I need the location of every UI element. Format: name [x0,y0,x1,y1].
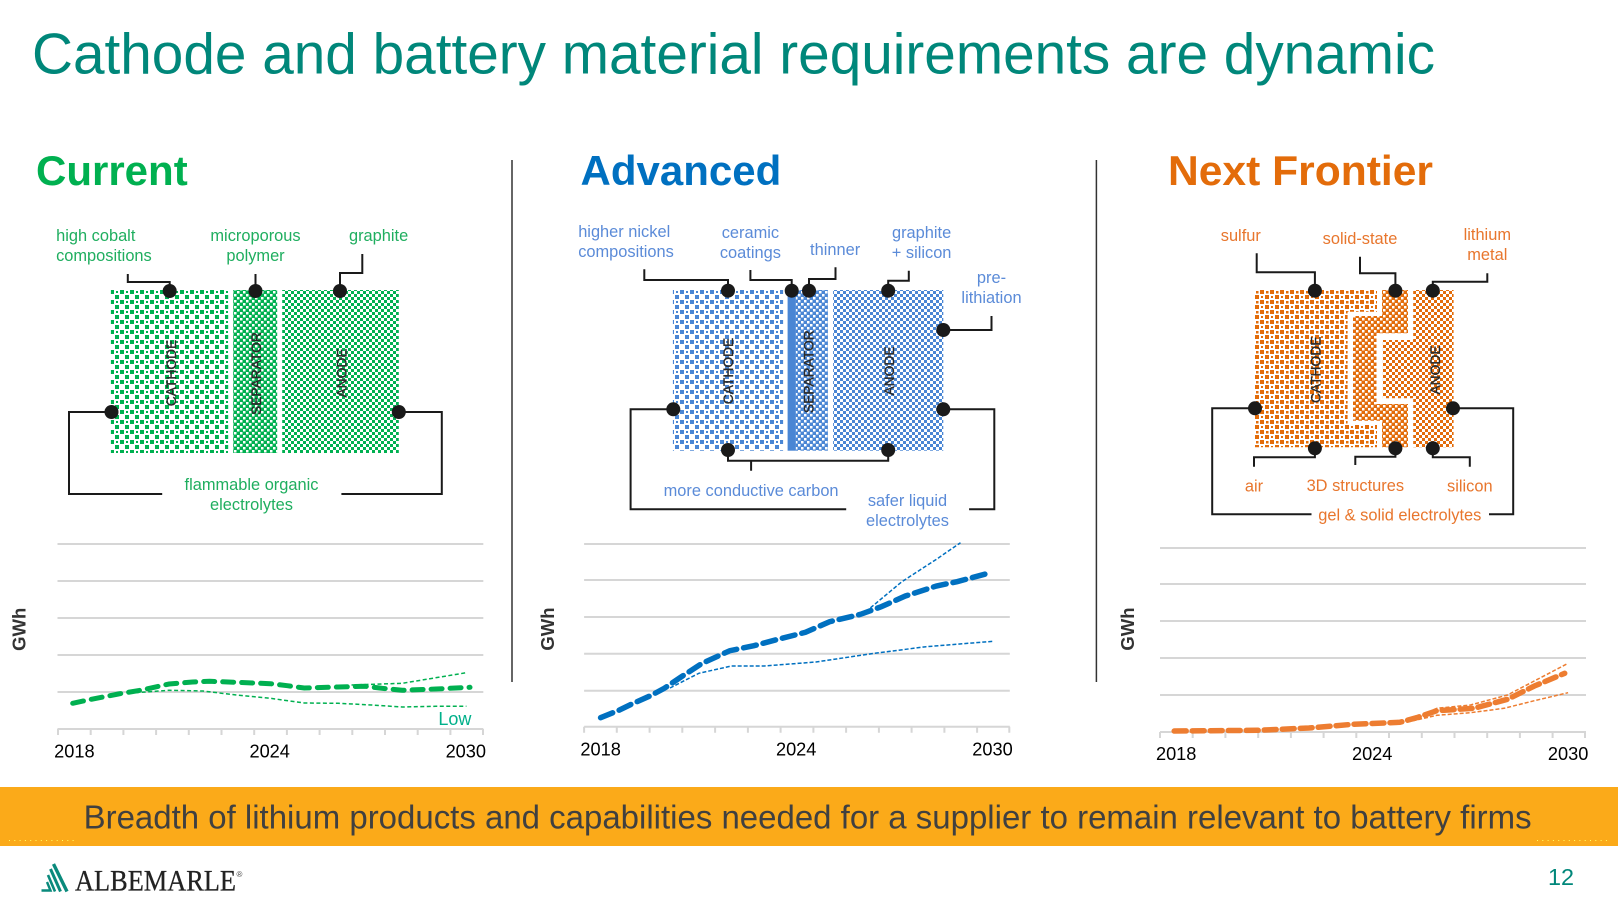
callout: graphite + silicon: graphite [892,224,951,242]
cathode [673,290,783,451]
callout: microporous polymer [210,227,301,298]
takeaway banner: Breadth of lithium products and capabilities needed for a supplier to remain relevant to battery firms [84,798,1532,835]
x axis labels: 2030 [1548,744,1588,764]
x axis labels: 2024 [249,742,290,762]
callout: thinner: thinner [810,241,861,259]
callout: pre-lithiation: lithiation [961,289,1022,307]
callout: high cobalt compositions: compositions [56,247,152,265]
low scenario line [670,641,993,688]
high scenario line [866,543,960,612]
x axis labels: 2030 [446,742,486,762]
callout: silicon: silicon [1447,478,1493,496]
callout: gel and solid electrolytes [1212,401,1513,525]
solid-state separator [1353,290,1408,447]
battery diagram: next frontier [1212,226,1513,525]
logo: Albemarle [42,864,242,898]
registered mark: ® [236,870,242,879]
x axis labels: 2030 [972,740,1013,760]
title: Cathode and battery material requirements are dynamic [32,22,1435,86]
wordmark: ALBEMARLE [75,866,236,898]
callout: lithium metal [1426,226,1511,298]
callout: air: air [1245,478,1264,496]
takeaway banner [0,787,1618,846]
x axis labels [580,740,1013,760]
axis title: GWh [8,608,29,651]
panel: next frontier [1117,147,1588,764]
callout: flammable organic electrolytes [69,405,442,514]
callout: safer liquid electrolytes [631,402,994,530]
cathode [111,290,228,453]
x axis labels [1156,744,1588,764]
callout: graphite + silicon: + silicon [892,244,951,262]
callout: thinner [802,241,861,298]
callout: lithium metal: lithium [1464,226,1511,244]
callout: pre-lithiation [936,269,1022,337]
callout: graphite: graphite [349,227,408,245]
low scenario line [135,690,466,707]
callout: gel and solid electrolytes: gel & solid electrolytes [1318,507,1481,525]
battery diagram: current [56,227,442,514]
x axis labels: 2018 [54,742,95,762]
callout: higher nickel compositions [578,223,735,298]
callout: 3D structures: 3D structures [1307,477,1404,495]
callout: higher nickel compositions: compositions [578,243,674,261]
callout: pre-lithiation: pre- [977,269,1006,287]
callout: microporous polymer: microporous [210,227,301,245]
chart: current GWh forecast [8,544,486,762]
callout: higher nickel compositions: higher nickel [578,223,670,241]
callout: high cobalt compositions: high cobalt [56,227,136,245]
callout: sulfur [1221,227,1322,298]
x axis labels: 2024 [776,740,816,760]
callout: sulfur: sulfur [1221,227,1261,245]
x axis labels [54,742,486,762]
callout: 3D structures [1307,441,1404,495]
chart: next frontier GWh forecast [1117,548,1588,764]
callout: solid-state: solid-state [1323,230,1397,248]
separator [233,290,277,453]
high scenario line [1406,663,1568,722]
callout: solid-state [1323,230,1402,298]
x axis labels: 2018 [580,740,621,760]
heading: advanced: Advanced [580,147,781,194]
x axis labels: 2018 [1156,744,1196,764]
axis title: GWh [537,607,558,651]
anode: ANODE [334,348,350,398]
callout: ceramic coatings: coatings [720,244,781,262]
callout: air [1245,441,1322,496]
heading: current: Current [36,147,188,194]
callout: flammable organic electrolytes: electrolytes [210,496,293,514]
callout: graphite + silicon [881,224,951,298]
callout: ceramic coatings [720,224,799,298]
low label: Low [438,709,472,729]
callout: ceramic coatings: ceramic [722,224,779,242]
cathode: CATHODE [1309,337,1324,403]
heading: next frontier: Next Frontier [1168,147,1433,194]
callout: safer liquid electrolytes: safer liquid [868,492,947,510]
low scenario line [1406,693,1568,722]
axis title: GWh [1117,607,1138,651]
anode [282,290,399,453]
base scenario line [73,681,470,703]
callout: high cobalt compositions [56,227,177,298]
callout: safer liquid electrolytes: electrolytes [866,512,949,530]
separator: SEPARATOR [249,332,264,415]
callout: more conductive carbon: more conductive carbon [664,482,839,500]
cathode: CATHODE [164,340,179,406]
separator with ceramic coating: SEPARATOR [801,330,816,413]
icon: logo mark [42,864,67,892]
callout: microporous polymer: polymer [226,247,285,265]
callout: silicon [1426,441,1493,496]
base scenario line [1174,673,1565,731]
chart: advanced GWh forecast [537,543,1013,760]
base scenario line [601,572,991,718]
anode [833,290,943,451]
cathode: CATHODE [721,338,736,404]
page number: 12 [1548,864,1574,890]
high scenario line [352,673,466,685]
x axis labels: 2024 [1352,744,1392,764]
anode [1383,290,1454,447]
callout: graphite [333,227,408,298]
cathode [1254,290,1377,447]
panel: current [8,147,486,762]
separator with ceramic coating [788,290,828,451]
battery diagram: advanced [578,223,1022,530]
panel: advanced [537,147,1022,760]
callout: flammable organic electrolytes: flammable organic [185,476,318,494]
callout: more conductive carbon [664,443,895,500]
callout: lithium metal: metal [1467,246,1507,264]
anode: ANODE [1428,345,1443,395]
anode: ANODE [882,346,897,396]
